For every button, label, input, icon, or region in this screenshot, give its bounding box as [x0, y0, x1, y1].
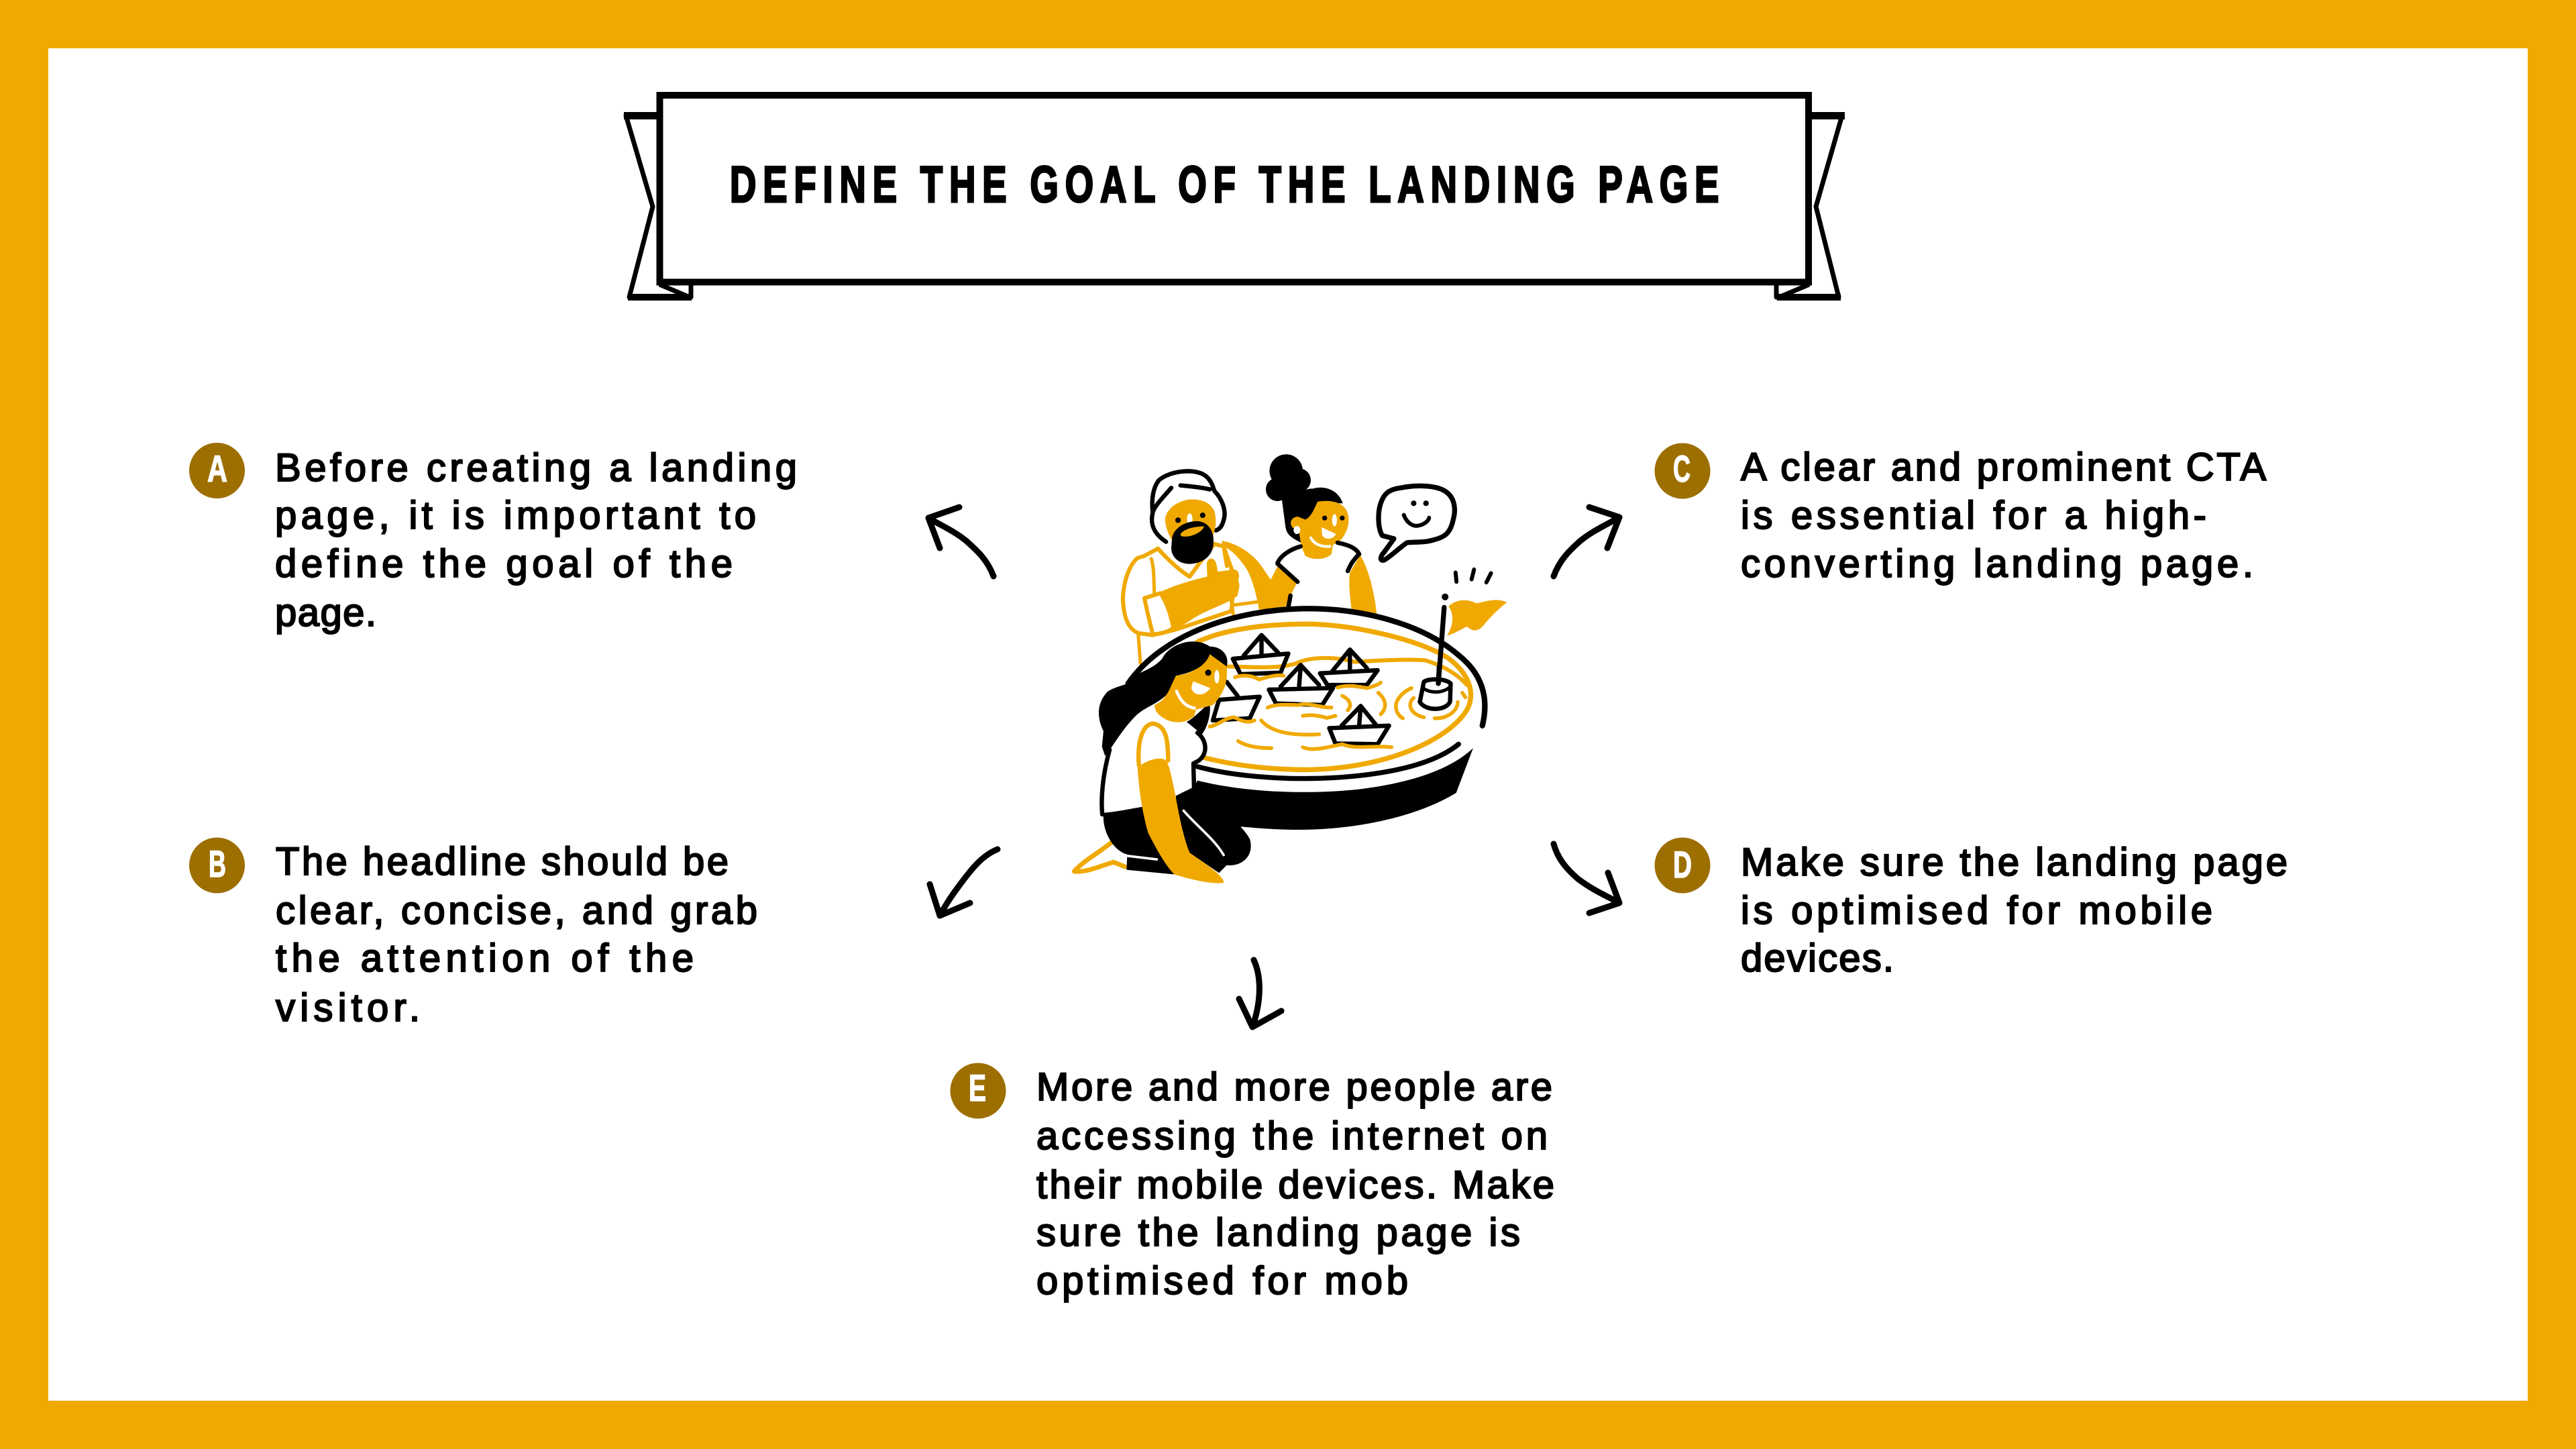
- flag and buoy: [1420, 570, 1507, 709]
- badge B: [189, 837, 245, 894]
- text B: visitor.: [276, 986, 420, 1030]
- title banner: [624, 95, 1845, 301]
- badge E: E: [969, 1067, 986, 1109]
- item E: [950, 1063, 1554, 1303]
- arrow to B: [930, 849, 998, 916]
- badge C: C: [1673, 447, 1690, 490]
- man with turban and beard: [1123, 471, 1297, 663]
- text D: Make sure the landing page: [1741, 841, 2288, 884]
- kneeling woman: [1074, 641, 1251, 883]
- text C: [1741, 445, 2266, 586]
- central illustration: team with paper boats: [1074, 454, 1507, 883]
- woman with hair bun: [1266, 454, 1377, 614]
- banner main box: [660, 95, 1809, 282]
- title text: DEFINE THE GOAL OF THE LANDING PAGE: [730, 156, 1719, 213]
- arrow to E: [1239, 960, 1281, 1027]
- item B: [189, 837, 757, 1030]
- text C: converting landing page.: [1741, 542, 2253, 586]
- badge A: [189, 443, 245, 498]
- item D: [1654, 837, 2288, 980]
- text A: [275, 446, 797, 635]
- text D: [1741, 841, 2288, 980]
- arrow to D: [1554, 844, 1619, 913]
- speech bubble: [1379, 486, 1454, 560]
- badge B: B: [209, 843, 226, 885]
- text A: page, it is important to: [275, 494, 756, 537]
- badge A: A: [207, 447, 227, 490]
- text A: page.: [275, 591, 376, 635]
- text C: is essential for a high-: [1741, 494, 2206, 537]
- badge D: [1654, 837, 1711, 894]
- text B: clear, concise, and grab: [276, 889, 757, 932]
- text E: [1036, 1065, 1554, 1303]
- text A: Before creating a landing: [275, 446, 797, 490]
- text B: [276, 840, 757, 1030]
- text E: More and more people are: [1036, 1065, 1552, 1109]
- text D: devices.: [1741, 936, 1894, 980]
- paper boats: [1213, 635, 1389, 744]
- arrow to C: [1554, 507, 1619, 576]
- arrow to A: [928, 507, 994, 576]
- badge C: [1654, 443, 1711, 499]
- banner left ribbon: [624, 112, 692, 301]
- text B: The headline should be: [276, 840, 729, 883]
- text D: is optimised for mobile: [1741, 889, 2212, 932]
- text E: sure the landing page is: [1036, 1211, 1520, 1254]
- text E: their mobile devices. Make: [1036, 1163, 1554, 1207]
- text A: define the goal of the: [275, 542, 733, 586]
- text E: accessing the internet on: [1036, 1114, 1548, 1158]
- text B: the attention of the: [276, 936, 694, 980]
- water waves: [1210, 676, 1465, 749]
- text C: A clear and prominent CTA: [1741, 445, 2266, 489]
- badge E: [950, 1063, 1006, 1119]
- item C: [1654, 443, 2266, 586]
- item A: [189, 443, 797, 635]
- text E: optimised for mob: [1036, 1259, 1408, 1303]
- badge D: D: [1673, 843, 1692, 885]
- banner right ribbon: [1776, 112, 1845, 301]
- dish rim: [1128, 608, 1485, 830]
